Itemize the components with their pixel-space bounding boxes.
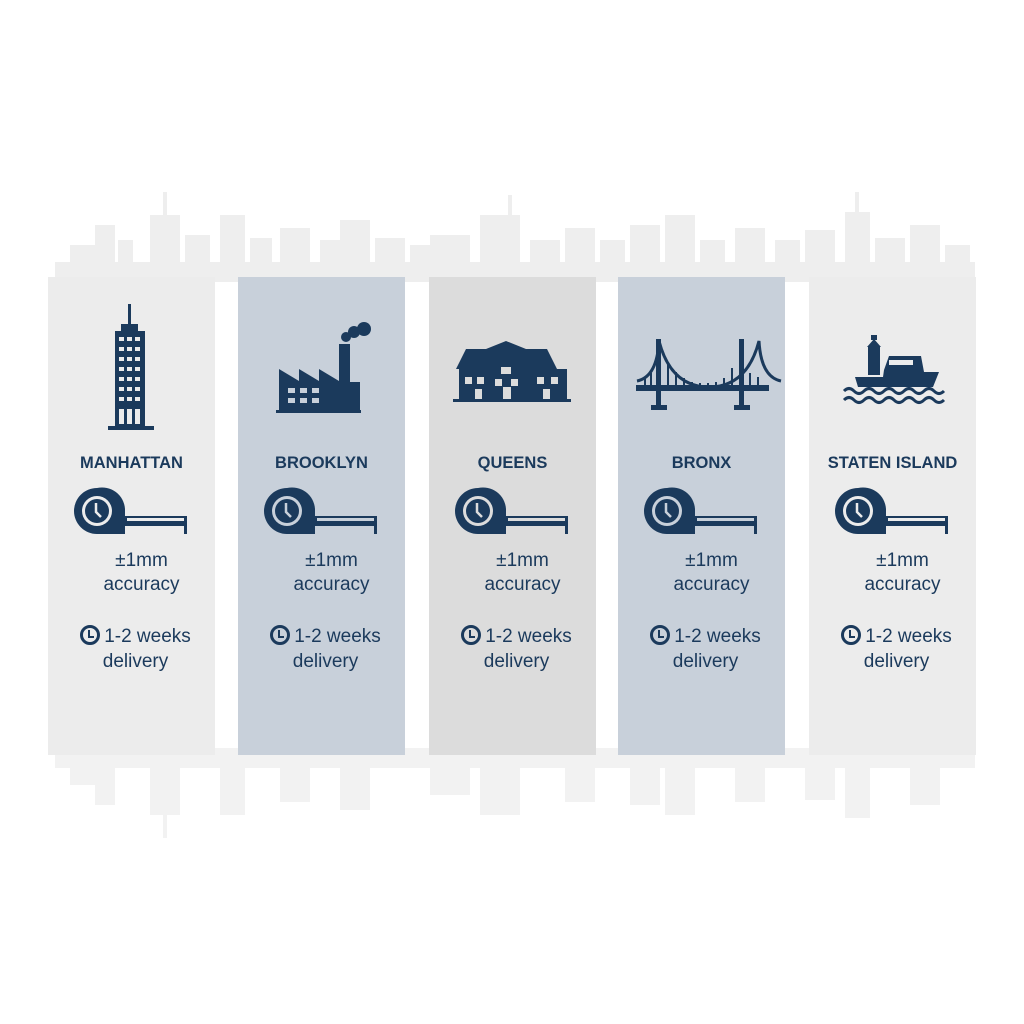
text: accuracy: accuracy xyxy=(864,574,941,595)
title: BROOKLYN xyxy=(275,454,368,472)
text: delivery xyxy=(841,625,952,672)
text: accuracy xyxy=(103,550,180,595)
text: delivery: 1-2 weeks xyxy=(674,626,761,647)
icon: tape measure xyxy=(455,488,568,534)
text: accuracy xyxy=(293,550,370,595)
text: delivery: delivery xyxy=(293,651,358,672)
title: BRONX xyxy=(672,454,731,472)
text: delivery: delivery xyxy=(864,651,929,672)
title: QUEENS xyxy=(478,454,547,472)
text: accuracy xyxy=(673,550,750,595)
text: delivery xyxy=(270,625,381,672)
text: accuracy: accuracy xyxy=(673,574,750,595)
panel: brooklyn xyxy=(238,277,405,755)
text: accuracy: ±1mm xyxy=(876,550,929,571)
text: delivery: delivery xyxy=(673,651,738,672)
icon: lighthouse and ferry xyxy=(843,335,945,404)
title: STATEN ISLAND xyxy=(828,454,957,472)
text: delivery xyxy=(650,625,761,672)
text: accuracy xyxy=(864,550,941,595)
text: accuracy: ±1mm xyxy=(305,550,358,571)
title: MANHATTAN xyxy=(80,454,183,472)
icon: tape measure xyxy=(74,488,187,534)
icon: houses xyxy=(453,341,571,402)
icon: tape measure xyxy=(264,488,377,534)
text: accuracy xyxy=(484,550,561,595)
panel: bronx xyxy=(618,277,785,755)
icon: tape measure xyxy=(644,488,757,534)
text: accuracy: ±1mm xyxy=(115,550,168,571)
icon: factory xyxy=(276,322,371,413)
text: accuracy: accuracy xyxy=(484,574,561,595)
text: delivery: 1-2 weeks xyxy=(865,626,952,647)
panel: manhattan xyxy=(48,277,215,755)
text: accuracy: ±1mm xyxy=(496,550,549,571)
text: delivery: delivery xyxy=(103,651,168,672)
text: accuracy: accuracy xyxy=(103,574,180,595)
panel: queens xyxy=(429,277,596,755)
panel: staten island xyxy=(809,277,976,755)
icon: skyscraper xyxy=(108,304,154,430)
icon: bridge xyxy=(636,339,782,410)
text: delivery: delivery xyxy=(484,651,549,672)
text: delivery: 1-2 weeks xyxy=(485,626,572,647)
text: delivery: 1-2 weeks xyxy=(104,626,191,647)
text: delivery xyxy=(80,625,191,672)
text: delivery xyxy=(461,625,572,672)
text: delivery: 1-2 weeks xyxy=(294,626,381,647)
icon: tape measure xyxy=(835,488,948,534)
text: accuracy: accuracy xyxy=(293,574,370,595)
text: accuracy: ±1mm xyxy=(685,550,738,571)
